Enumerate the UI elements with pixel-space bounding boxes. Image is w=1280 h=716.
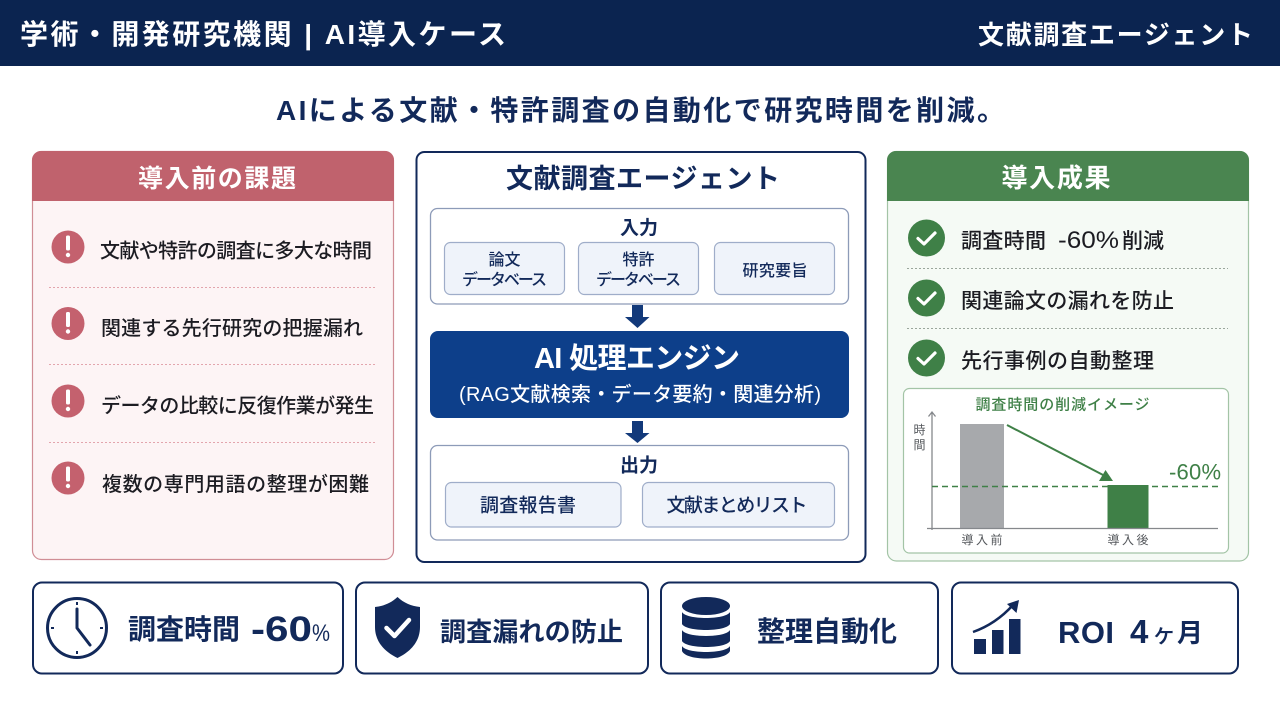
KPI card: ROI: 月 — [1177, 618, 1203, 648]
main headline: AIによる文献・特許調査の自動化で研究時間を削減。 — [276, 95, 1005, 126]
result item 2: 関連論文の漏れを防止 — [961, 290, 1174, 313]
chart title: 調査時間の削減イメージ — [976, 396, 1150, 414]
y axis label: 時 — [913, 423, 926, 437]
input group — [430, 208, 848, 304]
header agent name: 文献調査エージェント — [978, 20, 1253, 50]
challenge item 4 — [52, 462, 369, 496]
KPI card: prevent omissions: 調査漏れの防止 — [440, 617, 623, 647]
input: patents database: 特許 — [622, 251, 655, 269]
result item 2 — [908, 280, 1174, 316]
result item 1 — [908, 220, 1164, 256]
KPI card: prevent omissions — [356, 582, 648, 674]
icon: shield — [375, 597, 420, 658]
challenge item 3 — [52, 384, 374, 418]
KPI card: ROI — [952, 582, 1238, 674]
KPI card: survey time: -60 — [251, 610, 312, 649]
input group: 入力 — [620, 217, 658, 239]
reduction arrow — [1007, 425, 1113, 481]
panel heading: results: 導入成果 — [1002, 163, 1110, 193]
KPI card: ROI: ROI — [1058, 615, 1114, 650]
label: before: 導入前 — [962, 532, 1002, 547]
challenge item 1 — [52, 230, 372, 264]
challenge item 2 — [52, 307, 363, 340]
y axis label: 間 — [913, 438, 926, 452]
challenge item 2: 関連する先行研究の把握漏れ — [101, 317, 363, 340]
y axis label — [913, 423, 926, 452]
result item 1: 調査時間 — [961, 230, 1046, 253]
input: patents database: データベース — [596, 270, 681, 289]
arrow: engine to output — [625, 421, 650, 443]
AI engine block: (RAG文献検索・データ要約・関連分析) — [459, 382, 821, 406]
output group: 出力 — [620, 454, 658, 476]
icon: database — [682, 597, 730, 658]
header title: 学術・開発研究機関 | AI導入ケース — [20, 19, 506, 50]
KPI card: ROI: ヶ — [1152, 621, 1176, 648]
input: papers database: 論文 — [488, 251, 521, 269]
chart: time reduction — [904, 388, 1228, 553]
agent heading: 文献調査エージェント — [506, 164, 780, 194]
panel: challenges before introduction — [32, 151, 394, 560]
output: report — [446, 482, 621, 527]
input: research abstract: 研究要旨 — [742, 262, 808, 280]
output: literature list: 文献まとめリスト — [666, 494, 808, 516]
AI engine block: AI 処理エンジン — [534, 342, 740, 375]
AI engine block — [430, 331, 849, 418]
bar: before — [960, 424, 1004, 528]
output: literature list — [642, 482, 834, 527]
result item 3: 先行事例の自動整理 — [961, 350, 1154, 373]
header bar — [0, 0, 1280, 66]
output: report: 調査報告書 — [480, 494, 576, 516]
KPI card: survey time — [33, 582, 343, 674]
input: research abstract — [714, 242, 834, 294]
KPI card: survey time: 調査時間 — [128, 614, 240, 645]
panel heading: challenges — [32, 151, 394, 201]
result item 3 — [908, 340, 1154, 376]
KPI card: ROI: 4 — [1130, 613, 1149, 650]
x axis — [927, 528, 1218, 530]
input: papers database: データベース — [462, 270, 547, 289]
input: patents database — [578, 242, 698, 294]
panel heading: results — [887, 151, 1249, 201]
icon: growth chart — [973, 600, 1020, 654]
icon: clock — [48, 598, 106, 658]
KPI card: automation — [661, 582, 938, 674]
challenge item 4: 複数の専門用語の整理が困難 — [102, 473, 369, 496]
panel heading: challenges: 導入前の課題 — [138, 165, 296, 193]
reduction label: -60% — [1169, 460, 1221, 484]
result item 1: -60% — [1058, 227, 1119, 254]
result item 1: 削減 — [1122, 230, 1164, 253]
input: papers database — [444, 242, 564, 294]
KPI card: automation: 整理自動化 — [757, 616, 897, 647]
panel: results — [887, 151, 1249, 561]
KPI card: survey time: % — [312, 620, 330, 647]
panel: agent flow — [416, 152, 866, 562]
y axis — [928, 412, 936, 530]
label: after: 導入後 — [1108, 533, 1148, 547]
bar: after — [1108, 485, 1148, 528]
output group — [430, 446, 848, 540]
challenge item 3: データの比較に反復作業が発生 — [101, 394, 374, 418]
challenge item 1: 文献や特許の調査に多大な時間 — [100, 240, 372, 262]
arrow: input to engine — [625, 305, 650, 328]
